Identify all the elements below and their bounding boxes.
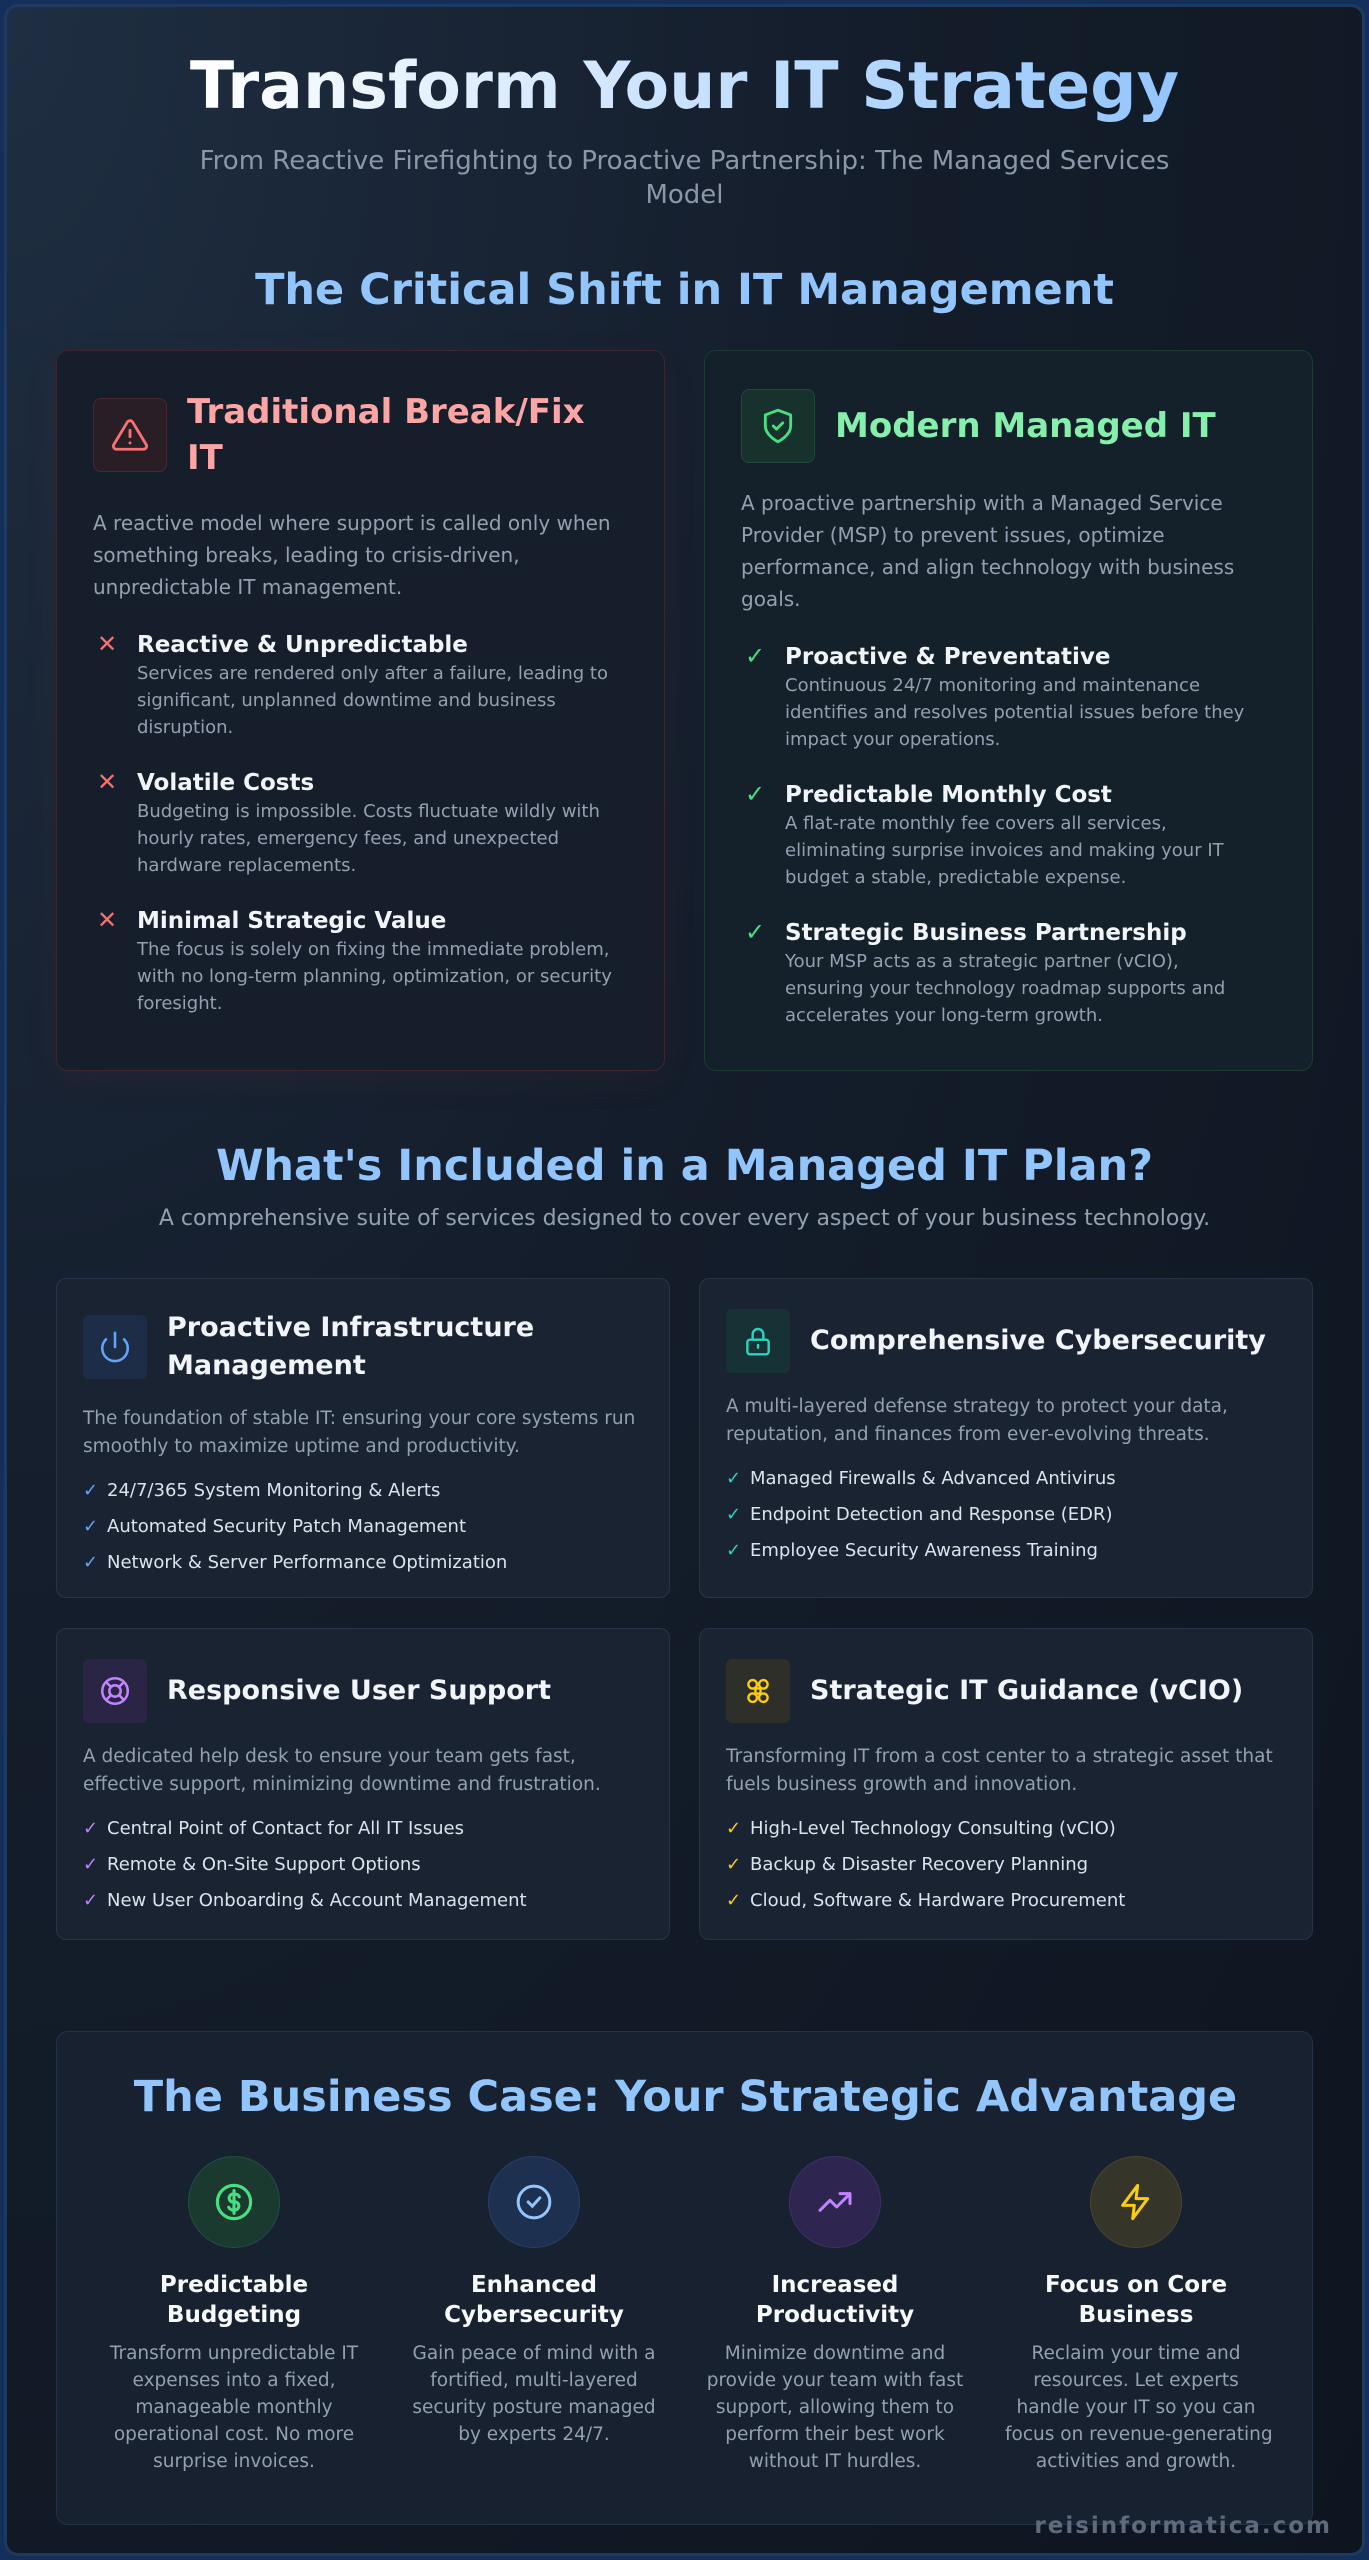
title: Transform Your IT Strategy bbox=[190, 49, 1179, 124]
card: vCIO: ✓ bbox=[726, 1854, 741, 1875]
item: proactive: Proactive & Preventative bbox=[785, 644, 1110, 670]
benefit: core business: Reclaim your time and resources. Let experts handle your IT so you can focus on revenue‑generating activities and growth. bbox=[1005, 2343, 1273, 2472]
item: predictable cost bbox=[745, 780, 1224, 888]
item: volatile costs: Volatile Costs bbox=[137, 770, 314, 796]
panel header: Modern Managed IT bbox=[835, 406, 1216, 446]
card: user support bbox=[56, 1628, 670, 1940]
item: reactive: ✕ bbox=[97, 630, 117, 658]
panel header: Traditional Break/Fix IT bbox=[187, 392, 585, 478]
card: infrastructure bbox=[56, 1278, 670, 1598]
item: partnership: Your MSP acts as a strategic partner (vCIO), ensuring your technology roadmap supports and accelerates your long-term growth. bbox=[785, 951, 1225, 1026]
card: user support: A dedicated help desk to ensure your team gets fast, effective support, minimizing downtime and frustration. bbox=[83, 1746, 601, 1795]
icon: strategy bbox=[726, 1659, 790, 1723]
card: cybersecurity: ✓ bbox=[726, 1540, 741, 1561]
card: user support: Remote & On-Site Support Options bbox=[107, 1854, 421, 1875]
card: vCIO: Strategic IT Guidance (vCIO) bbox=[810, 1675, 1243, 1706]
icon: lifebuoy bbox=[83, 1659, 147, 1723]
card: user support: ✓ bbox=[83, 1854, 98, 1875]
item: predictable cost: Predictable Monthly Cost bbox=[785, 782, 1112, 808]
icon: lock bbox=[726, 1309, 790, 1373]
heading: included: What's Included in a Managed IT Plan? bbox=[216, 1141, 1153, 1191]
item: proactive bbox=[745, 642, 1244, 750]
item: minimal value: ✕ bbox=[97, 906, 117, 934]
item: proactive: ✓ bbox=[745, 642, 765, 670]
card: user support: New User Onboarding & Account Management bbox=[107, 1890, 527, 1911]
panel header bbox=[741, 389, 1216, 463]
card: vCIO bbox=[699, 1628, 1313, 1940]
card: cybersecurity: ✓ bbox=[726, 1504, 741, 1525]
item: partnership: ✓ bbox=[745, 918, 765, 946]
card: user support: ✓ bbox=[83, 1818, 98, 1839]
item: minimal value: Minimal Strategic Value bbox=[137, 908, 446, 934]
card: user support: Central Point of Contact for All IT Issues bbox=[107, 1818, 464, 1839]
benefit: core business: Focus on Core bbox=[1045, 2272, 1227, 2298]
icon: power bbox=[83, 1315, 147, 1379]
panel: modern managed IT bbox=[704, 350, 1313, 1071]
benefit: budgeting: Transform unpredictable IT expenses into a fixed, manageable monthly operational cost. No more surprise invoices. bbox=[110, 2343, 358, 2472]
card: cybersecurity: Managed Firewalls & Advanced Antivirus bbox=[750, 1468, 1116, 1489]
benefit: productivity: Minimize downtime and provide your team with fast support, allowing them to perform their best work without IT hurdles. bbox=[707, 2343, 963, 2472]
card: vCIO: Cloud, Software & Hardware Procurement bbox=[750, 1890, 1125, 1911]
card: cybersecurity: A multi-layered defense strategy to protect your data, reputation, and finances from ever-evolving threats. bbox=[726, 1396, 1228, 1445]
card: cybersecurity: Endpoint Detection and Response (EDR) bbox=[750, 1504, 1113, 1525]
panel: traditional break/fix bbox=[56, 350, 665, 1071]
card: vCIO: Backup & Disaster Recovery Planning bbox=[750, 1854, 1088, 1875]
benefit: budgeting: Predictable bbox=[160, 2272, 308, 2298]
item: minimal value bbox=[97, 906, 612, 1014]
card: infrastructure: ✓ bbox=[83, 1480, 98, 1501]
card: user support: Responsive User Support bbox=[167, 1675, 551, 1706]
item: predictable cost: A flat-rate monthly fee covers all services, eliminating surprise invoices and making your IT budget a stable, predictable expense. bbox=[785, 813, 1224, 888]
card: infrastructure: Proactive Infrastructure Management bbox=[167, 1312, 534, 1381]
panel: business case bbox=[56, 2031, 1313, 2525]
description: A proactive partnership with a Managed Service Provider (MSP) to prevent issues, optimize performance, and align technology with business goals. bbox=[741, 491, 1234, 611]
benefit: cybersecurity: Gain peace of mind with a fortified, multi-layered security posture managed by experts 24/7. bbox=[412, 2343, 656, 2445]
benefit: budgeting: Budgeting bbox=[167, 2302, 301, 2328]
card: vCIO: Transforming IT from a cost center to a strategic asset that fuels business growth and innovation. bbox=[726, 1746, 1273, 1795]
card: cybersecurity bbox=[699, 1278, 1313, 1598]
item: proactive: Continuous 24/7 monitoring and maintenance identifies and resolves potential issues before they impact your operations. bbox=[785, 675, 1244, 750]
subheading: A comprehensive suite of services designed to cover every aspect of your business technology. bbox=[159, 1206, 1210, 1231]
item: reactive: Services are rendered only after a failure, leading to significant, unplanned downtime and business disruption. bbox=[137, 663, 608, 738]
description: A reactive model where support is called only when something breaks, leading to crisis-driven, unpredictable IT management. bbox=[93, 511, 611, 599]
item: predictable cost: ✓ bbox=[745, 780, 765, 808]
benefit: cybersecurity: Enhanced bbox=[471, 2272, 597, 2298]
card: infrastructure: ✓ bbox=[83, 1516, 98, 1537]
item: volatile costs bbox=[97, 768, 600, 876]
item: reactive: Reactive & Unpredictable bbox=[137, 632, 468, 658]
card: infrastructure: 24/7/365 System Monitoring & Alerts bbox=[107, 1480, 440, 1501]
item: partnership bbox=[745, 918, 1225, 1026]
card: infrastructure: The foundation of stable IT: ensuring your core systems run smoothly to maximize uptime and productivity. bbox=[83, 1408, 635, 1457]
item: minimal value: The focus is solely on fixing the immediate problem, with no long-term planning, optimization, or security foresight. bbox=[137, 939, 612, 1014]
card: vCIO: ✓ bbox=[726, 1890, 741, 1911]
card: vCIO: ✓ bbox=[726, 1818, 741, 1839]
subtitle: From Reactive Firefighting to Proactive Partnership: The Managed Services Model bbox=[200, 146, 1169, 210]
item: partnership: Strategic Business Partnership bbox=[785, 920, 1187, 946]
benefit: productivity: Increased bbox=[772, 2272, 898, 2298]
benefit: core business: Business bbox=[1079, 2302, 1193, 2328]
benefit: cybersecurity: Cybersecurity bbox=[444, 2302, 624, 2328]
card: infrastructure: ✓ bbox=[83, 1552, 98, 1573]
card: cybersecurity: Comprehensive Cybersecurity bbox=[810, 1325, 1266, 1356]
footer: website: reisinformatica.com bbox=[1034, 2513, 1332, 2539]
card: infrastructure: Automated Security Patch Management bbox=[107, 1516, 466, 1537]
benefit: productivity bbox=[707, 2156, 963, 2472]
heading: business case: The Business Case: Your Strategic Advantage bbox=[134, 2072, 1237, 2122]
benefit: core business bbox=[1005, 2156, 1273, 2472]
card: cybersecurity: ✓ bbox=[726, 1468, 741, 1489]
card: infrastructure: Network & Server Performance Optimization bbox=[107, 1552, 507, 1573]
card: user support: ✓ bbox=[83, 1890, 98, 1911]
heading: critical shift: The Critical Shift in IT Management bbox=[255, 265, 1114, 315]
benefit: productivity: Productivity bbox=[756, 2302, 914, 2328]
item: volatile costs: Budgeting is impossible. Costs fluctuate wildly with hourly rates, emergency fees, and unexpected hardware replacements. bbox=[137, 801, 600, 876]
card: cybersecurity: Employee Security Awareness Training bbox=[750, 1540, 1098, 1561]
benefit: cybersecurity bbox=[412, 2156, 656, 2445]
card: vCIO: High-Level Technology Consulting (vCIO) bbox=[750, 1818, 1116, 1839]
benefit: budgeting bbox=[110, 2156, 358, 2472]
item: reactive bbox=[97, 630, 608, 738]
item: volatile costs: ✕ bbox=[97, 768, 117, 796]
